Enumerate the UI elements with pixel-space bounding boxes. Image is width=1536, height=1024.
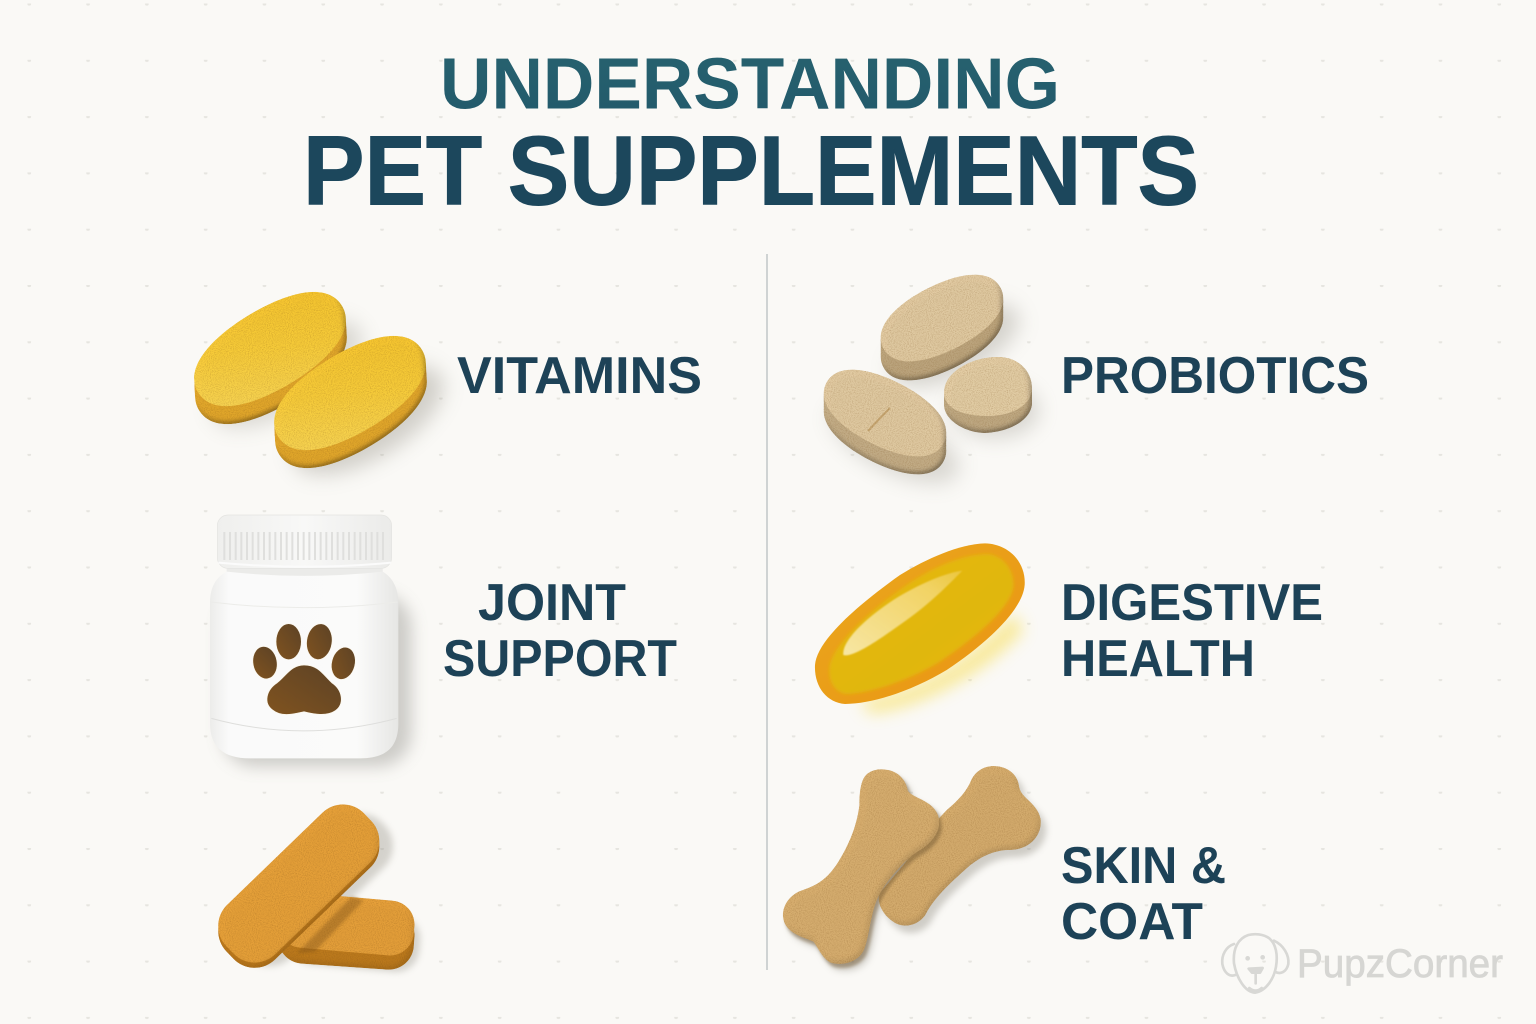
label: digestive health: HEALTH (1061, 630, 1255, 688)
watermark: pupzcorner logo (1222, 934, 1503, 993)
icon: amber softgel capsule (815, 543, 1025, 713)
title line: understanding: UNDERSTANDING (440, 44, 1060, 124)
jar body (210, 565, 398, 758)
icon: white jar with paw print (210, 515, 412, 767)
title (303, 44, 1199, 226)
icon: bone shaped chews (783, 766, 1046, 971)
icon: orange oblong tablets (206, 792, 422, 980)
label: joint support (443, 574, 677, 688)
label: joint support: SUPPORT (443, 630, 677, 688)
label: joint support: JOINT (478, 574, 626, 632)
title line: pet supplements: PET SUPPLEMENTS (303, 116, 1199, 226)
label: skin and coat: SKIN & (1061, 837, 1226, 895)
wordmark: PupzCorner (1297, 942, 1503, 986)
label: probiotics: PROBIOTICS (1061, 347, 1369, 405)
icon: tan probiotic tablets (811, 259, 1039, 501)
label: vitamins: VITAMINS (457, 347, 702, 405)
icon: dog head outline (1222, 934, 1288, 993)
jar lid (217, 515, 392, 568)
paw print (250, 622, 359, 714)
label: digestive health: DIGESTIVE (1061, 574, 1323, 632)
label: skin and coat: COAT (1061, 893, 1203, 951)
label: digestive health (1061, 574, 1323, 688)
label: skin and coat (1061, 837, 1226, 951)
icon: yellow vitamin tablets (177, 271, 460, 496)
